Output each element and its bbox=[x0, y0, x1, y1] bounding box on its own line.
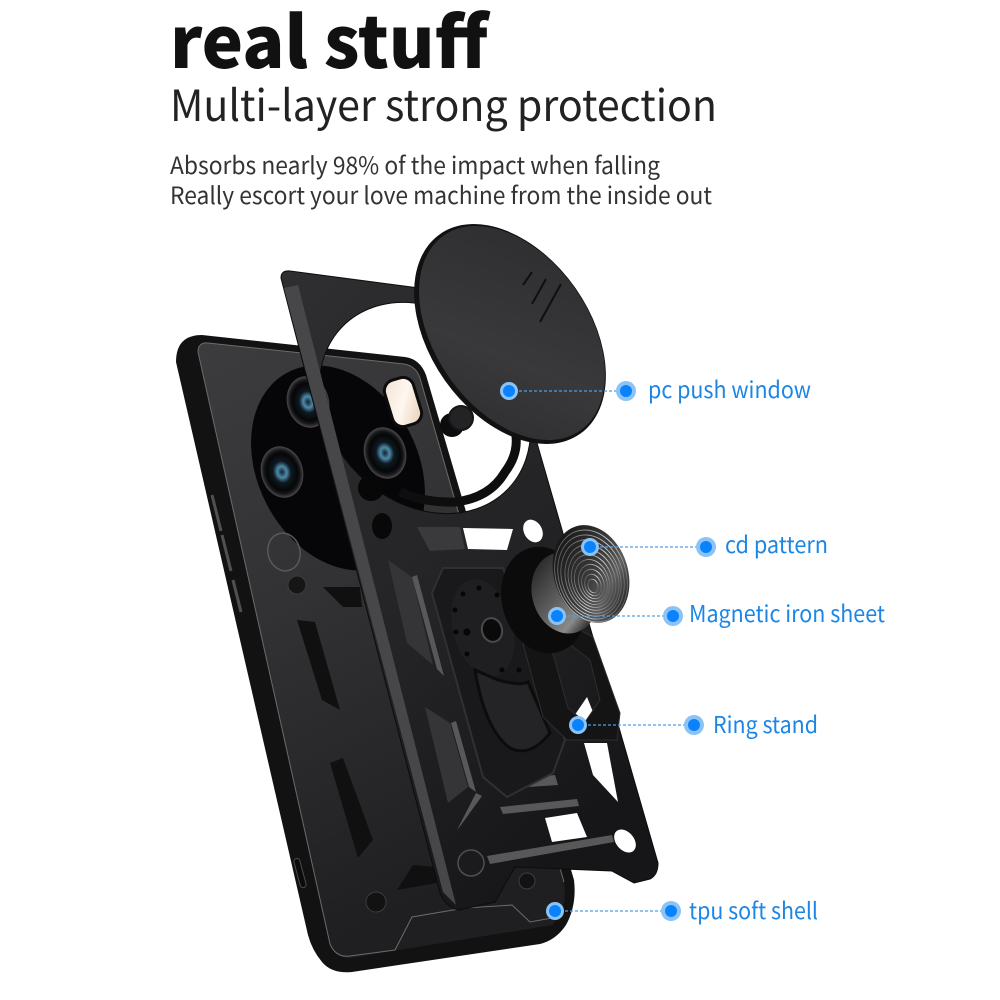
bottom port bbox=[293, 858, 307, 888]
callout: pc push window: pc push window bbox=[648, 371, 811, 405]
texture pads bbox=[297, 587, 437, 890]
pc push window disk bbox=[374, 188, 646, 480]
bottom pegs bbox=[366, 892, 386, 912]
description text: Absorbs nearly 98% of the impact when falling bbox=[170, 146, 660, 181]
disk body bbox=[374, 188, 646, 480]
cross bracket highlights bbox=[412, 575, 614, 864]
description text bbox=[170, 146, 712, 211]
callout: pc push window bbox=[500, 371, 811, 405]
phone with tpu soft shell bbox=[176, 335, 575, 972]
callout: ring stand bbox=[569, 706, 818, 740]
lens: left bbox=[255, 441, 309, 503]
lens: top bbox=[281, 371, 335, 433]
translucent side windows bbox=[388, 560, 468, 803]
gray phone window bbox=[417, 527, 465, 551]
lighter edge strip bbox=[284, 285, 456, 905]
hole rim bbox=[400, 436, 516, 502]
protective plate bbox=[281, 271, 658, 910]
flash bbox=[382, 375, 424, 429]
screw holes bbox=[358, 475, 384, 501]
disk face bbox=[381, 191, 643, 475]
oval recess bbox=[475, 670, 550, 751]
back panel bbox=[198, 343, 565, 958]
side buttons bbox=[212, 495, 241, 612]
callout: magnetic iron sheet bbox=[548, 595, 885, 629]
hinge tab bbox=[440, 406, 473, 437]
plate body with window bbox=[281, 271, 658, 910]
ring frame bbox=[513, 607, 620, 740]
circle mark bbox=[264, 530, 304, 574]
callout: cd pattern bbox=[581, 526, 828, 560]
callout: magnetic iron sheet: Magnetic iron sheet bbox=[689, 595, 885, 629]
cd pattern top bbox=[540, 515, 642, 633]
bottom screw bbox=[458, 850, 484, 876]
ring stand bbox=[489, 515, 642, 740]
subtitle: Multi-layer strong protection bbox=[170, 72, 717, 134]
centre screw bbox=[479, 616, 505, 644]
magnetic iron sheet base bbox=[489, 537, 599, 663]
callout: tpu soft shell bbox=[546, 892, 818, 926]
shell body bbox=[176, 335, 575, 972]
callout: tpu soft shell: tpu soft shell bbox=[689, 892, 818, 926]
metal neck bbox=[523, 545, 607, 641]
slider grooves bbox=[523, 272, 561, 322]
callout: cd pattern: cd pattern bbox=[725, 526, 828, 560]
central octagon bbox=[432, 568, 565, 797]
central disc with pegs bbox=[441, 572, 525, 684]
cut-out windows bbox=[463, 528, 618, 842]
inner edge line bbox=[198, 343, 564, 956]
description text: Really escort your love machine from the inside out bbox=[170, 176, 712, 211]
camera island bbox=[217, 335, 459, 601]
white holes bbox=[519, 516, 547, 546]
callout: ring stand: Ring stand bbox=[713, 706, 818, 740]
lens: right bbox=[358, 422, 412, 484]
peg bbox=[288, 576, 306, 594]
